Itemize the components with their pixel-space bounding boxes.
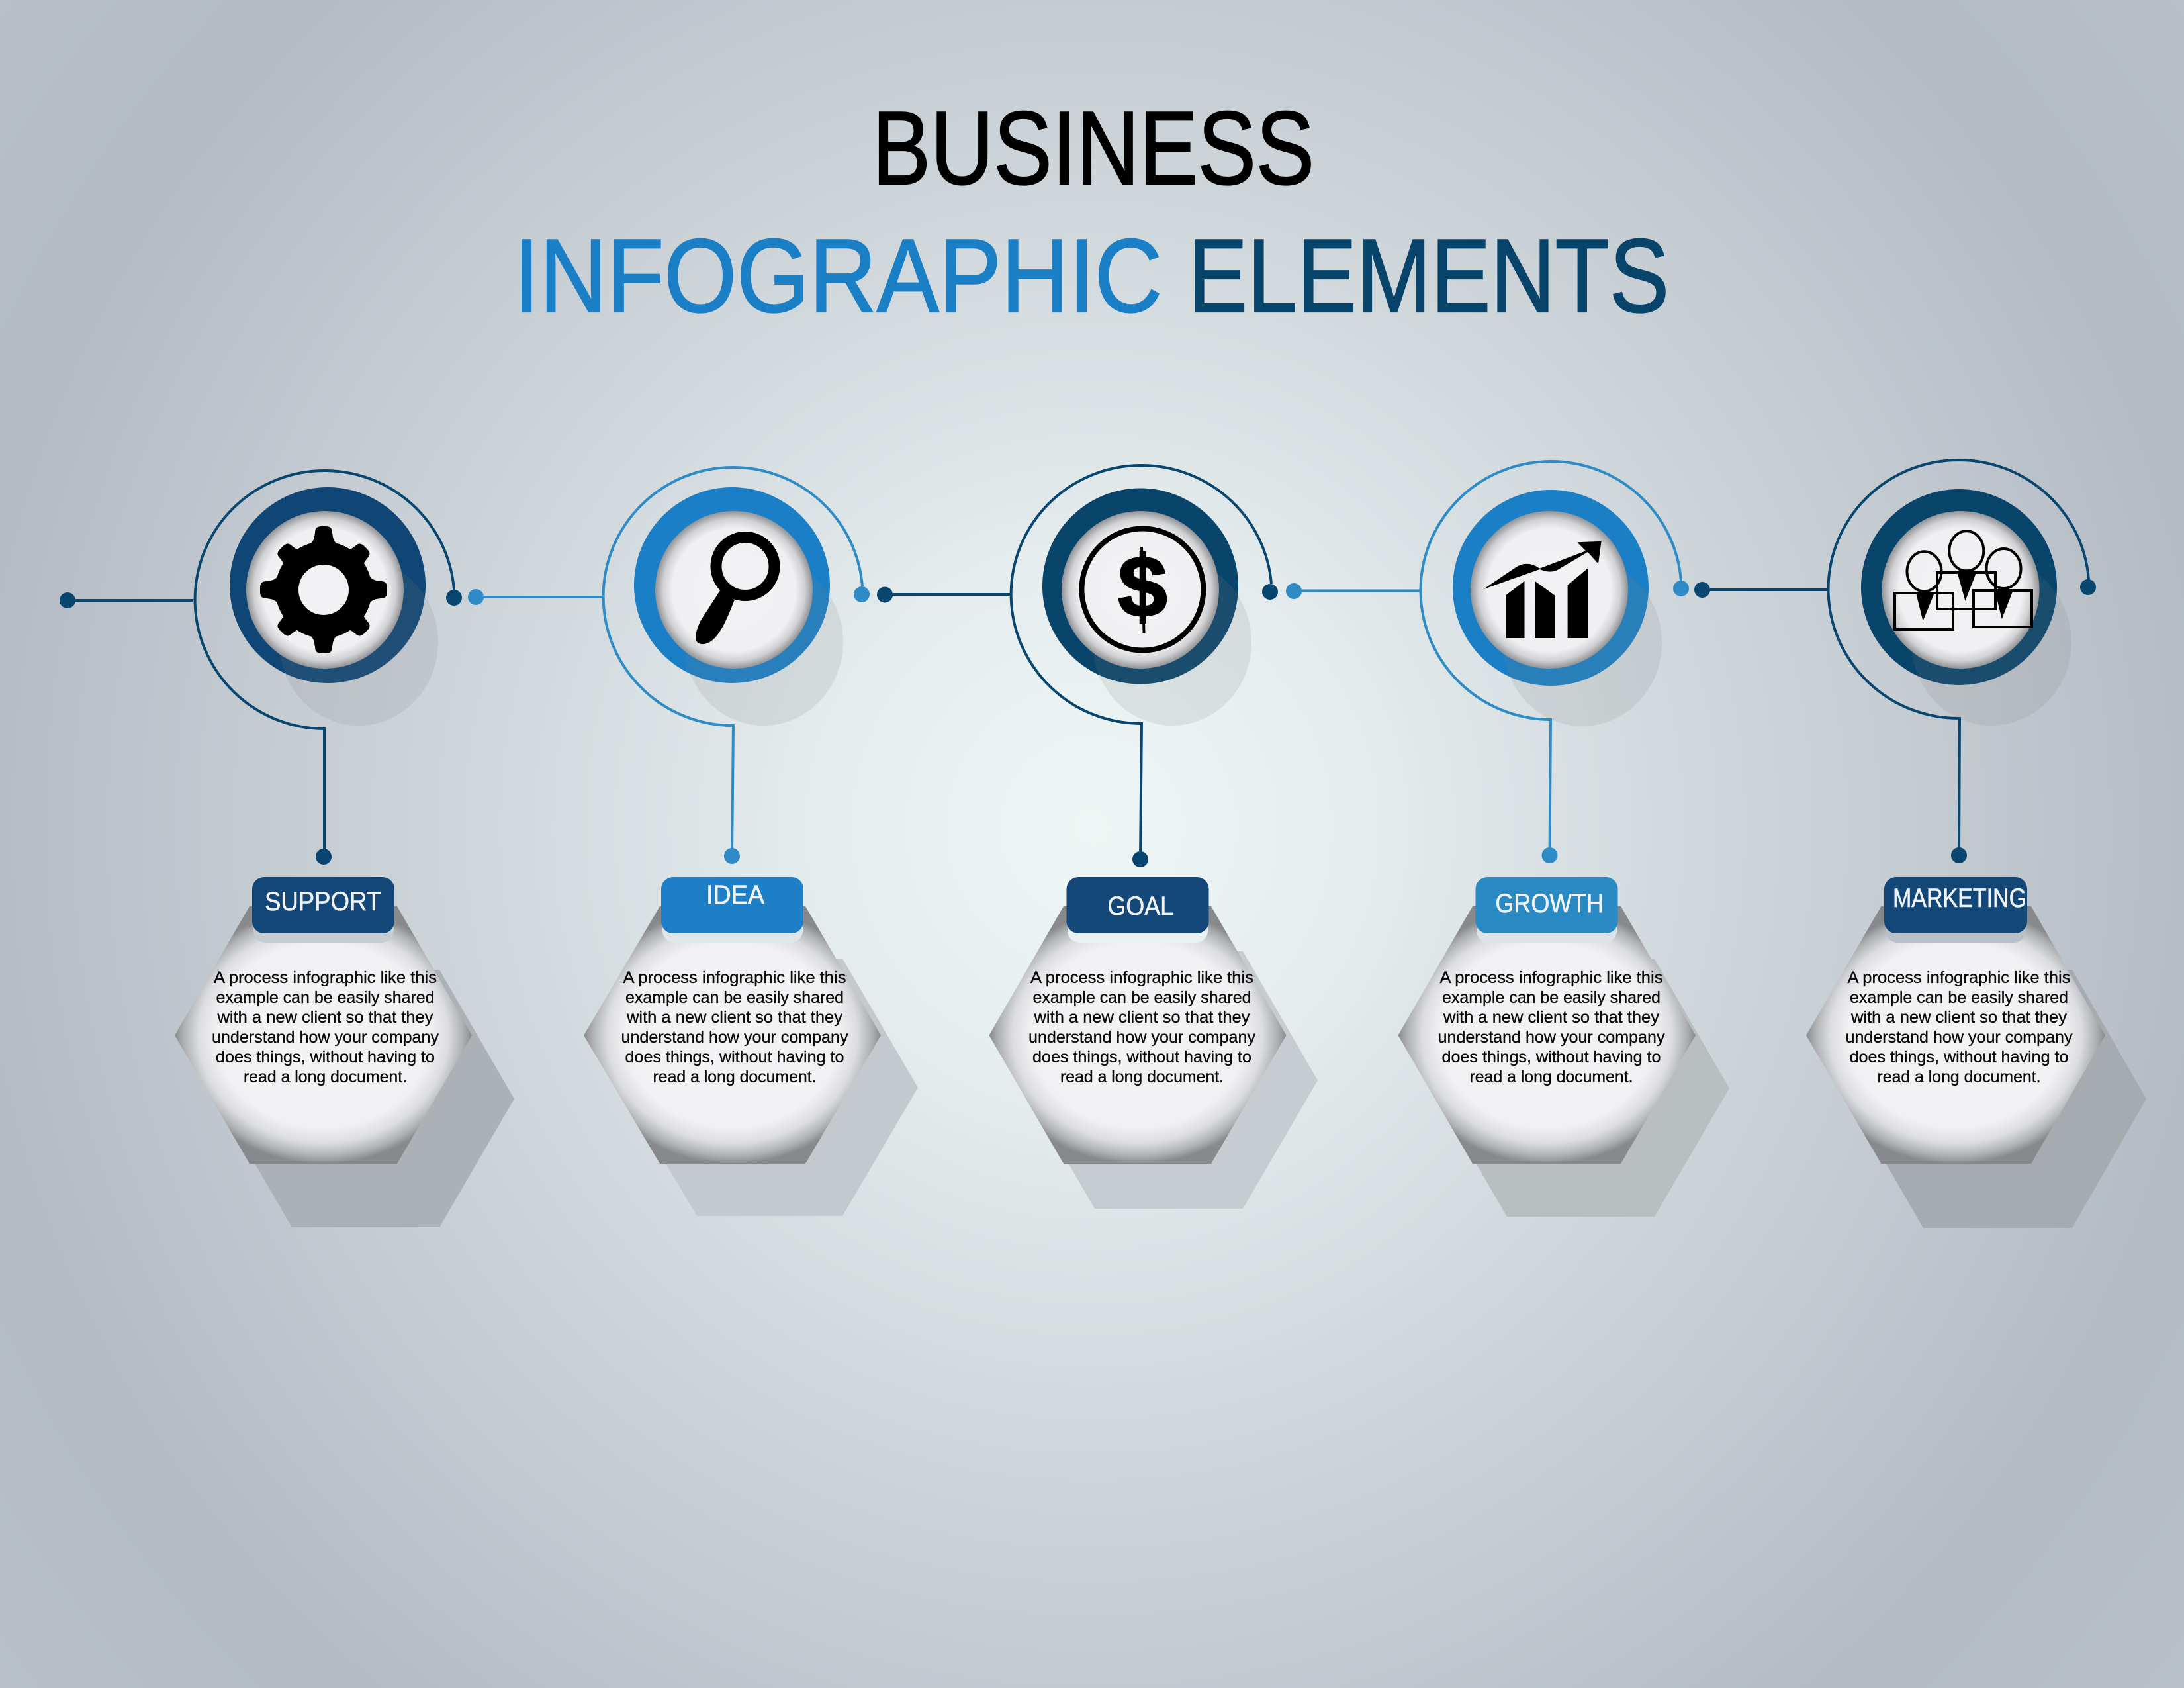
hexagon shadow [1432,959,1729,1217]
title [514,90,1669,334]
body text: A process infographic like this [1030,968,1253,987]
body text: understand how your company [1437,1028,1665,1047]
body text: does things, without having to [1849,1048,2069,1066]
body text: A process infographic like this [1848,968,2070,987]
tab: GOAL [1067,877,1208,933]
tab: GROWTH [1476,877,1617,933]
body text: understand how your company [621,1028,848,1047]
body text [1437,968,1665,1086]
hexagon shadow [1021,951,1318,1209]
step 4: growth [1286,461,1729,1217]
badge inner disc [655,511,813,669]
badge shadow [1093,559,1251,726]
body text: with a new client so that they [1850,1008,2068,1027]
body text [212,968,439,1086]
body text: does things, without having to [216,1048,435,1066]
tab: SUPPORT [252,877,394,933]
icon badge ring [1861,489,2057,685]
badge shadow [684,559,843,726]
body text: A process infographic like this [1440,968,1662,987]
body text: understand how your company [1028,1028,1255,1047]
body text: with a new client so that they [1033,1008,1250,1027]
tab: IDEA: IDEA [706,880,764,910]
title line: BUSINESS: BUSINESS [872,90,1314,207]
title line: INFOGRAPHIC ELEMENTS: ELEMENTS [1188,218,1669,334]
badge shadow [279,559,438,726]
tab cut-out [1068,887,1208,943]
body text: example can be easily shared [1850,988,2068,1007]
connector line and dots [60,471,462,865]
body text [1845,968,2073,1086]
body text: example can be easily shared [1032,988,1251,1007]
badge shadow [1911,559,2071,726]
hexagon shadow [217,970,514,1227]
body text: example can be easily shared [625,988,844,1007]
body text: does things, without having to [625,1048,844,1066]
badge inner disc [1882,511,2040,669]
body text: read a long document. [1469,1068,1633,1086]
icon badge ring [1042,489,1238,684]
connector line and dots [877,465,1278,867]
body text: understand how your company [212,1028,439,1047]
tab: MARKETING [1884,877,2027,933]
icon badge ring [230,487,426,683]
body text: read a long document. [1877,1068,2041,1086]
icon: magnifying glass [696,538,774,644]
body text: does things, without having to [1441,1048,1661,1066]
icon badge ring [634,487,830,683]
hexagon panel [1806,906,2105,1164]
body text [1028,968,1255,1086]
icon badge ring [1453,490,1649,686]
title line: INFOGRAPHIC ELEMENTS: INFOGRAPHIC [514,218,1162,334]
tab: GROWTH: GROWTH [1496,889,1604,918]
connector line and dots [468,467,870,864]
body text: does things, without having to [1032,1048,1251,1066]
tab cut-out [1477,887,1617,943]
icon: gear [260,526,387,653]
body text: with a new client so that they [626,1008,843,1027]
body text [621,968,848,1086]
step 3: goal [877,465,1318,1209]
icon: dollar coin: $ [1118,538,1167,635]
badge inner disc [246,511,404,669]
tab cut-out [253,887,394,943]
body text: with a new client so that they [1443,1008,1660,1027]
tab: MARKETING: MARKETING [1893,884,2026,913]
body text: with a new client so that they [216,1008,433,1027]
body text: read a long document. [1060,1068,1224,1086]
tab: IDEA [661,877,803,933]
connector line and dots [1694,460,2096,863]
icon: dollar coin [1081,528,1203,650]
connector line and dots [1286,461,1689,863]
step 5: marketing [1694,460,2146,1228]
icon: people group [1895,531,2032,630]
badge inner disc [1062,511,1219,669]
step 2: idea [468,467,918,1216]
body text: A process infographic like this [623,968,846,987]
icon: growth chart [1484,541,1602,638]
body text: A process infographic like this [214,968,437,987]
badge shadow [1503,559,1662,726]
body text: example can be easily shared [216,988,434,1007]
hexagon panel [584,906,881,1164]
tab: GOAL: GOAL [1108,892,1173,921]
hexagon panel [989,906,1287,1164]
body text: understand how your company [1845,1028,2073,1047]
body text: read a long document. [244,1068,407,1086]
hexagon panel [1398,906,1696,1164]
hexagon shadow [621,959,918,1216]
hexagon shadow [1848,970,2146,1228]
badge inner disc [1471,511,1628,669]
tab: SUPPORT: SUPPORT [265,887,381,916]
tab cut-out [662,887,803,943]
hexagon panel [175,906,472,1164]
step 1: support [60,471,514,1227]
title line: INFOGRAPHIC ELEMENTS [514,218,1669,334]
body text: example can be easily shared [1442,988,1661,1007]
body text: read a long document. [653,1068,817,1086]
tab cut-out [1886,887,2026,943]
